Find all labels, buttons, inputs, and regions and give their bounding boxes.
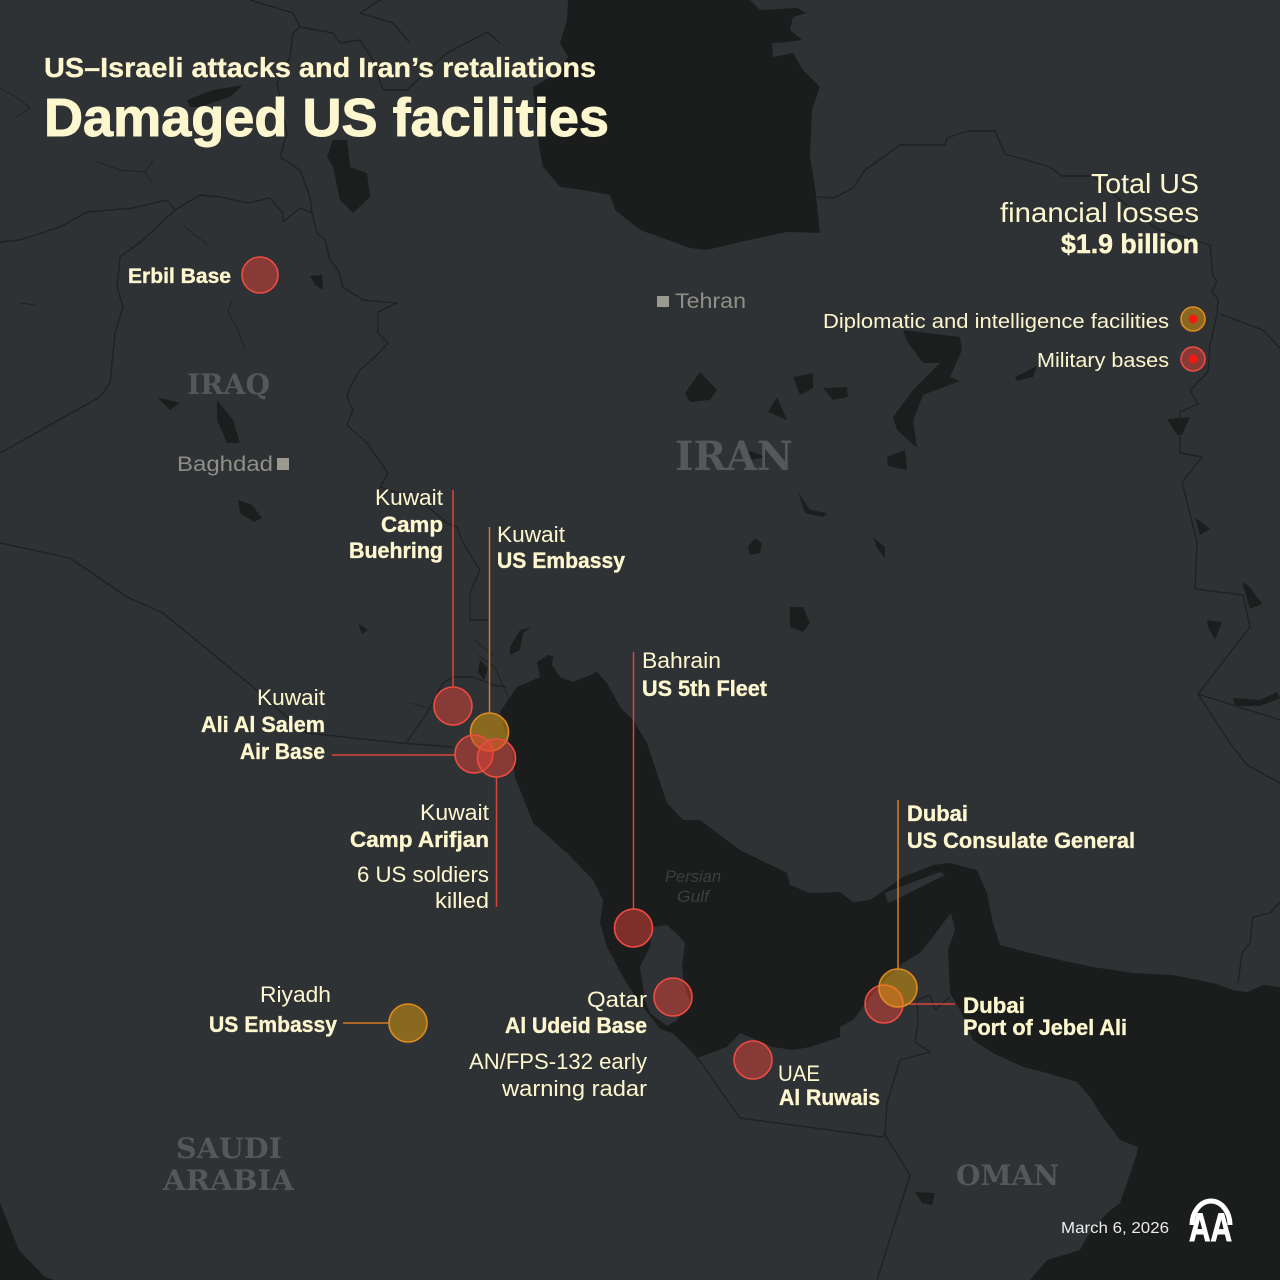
site: Dubai Port of Jebel Ali: Port of Jebel Ali (963, 1015, 1127, 1040)
site: Riyadh US Embassy: Riyadh (260, 982, 331, 1007)
total losses callout: Total US (1091, 168, 1199, 199)
site: Camp Buehring (349, 485, 472, 725)
site: Camp Buehring: Kuwait (375, 485, 443, 510)
site: Dubai US Consulate General: US Consulate General (907, 828, 1135, 853)
site: Kuwait US Embassy: Kuwait (497, 522, 565, 547)
map: Persian Gulf and Gulf of Oman (500, 655, 1280, 1280)
site: Riyadh US Embassy (209, 982, 427, 1042)
site: Kuwait US Embassy (470, 522, 626, 751)
total losses callout (1000, 168, 1199, 259)
subtitle: US–Israeli attacks and Iran’s retaliations (44, 52, 596, 83)
legend (823, 307, 1205, 372)
logo: Anadolu Agency: AA (1189, 1206, 1232, 1250)
site: Kuwait US Embassy: US Embassy (497, 548, 626, 573)
site: Qatar Al Udeid Base: AN/FPS-132 early (469, 1049, 647, 1074)
legend: diplomatic facilities (823, 307, 1205, 333)
site: UAE Al Ruwais (734, 1041, 880, 1110)
title block (44, 52, 609, 148)
country label: Oman: OMAN (956, 1159, 1059, 1192)
site: Bahrain US 5th Fleet: Bahrain (642, 648, 721, 673)
site: Camp Buehring: Buehring (349, 538, 443, 563)
country label: Iran: IRAN (675, 433, 793, 480)
site: Ali Al Salem Air Base: Air Base (240, 739, 325, 764)
map: Caspian Sea (533, 0, 825, 250)
total losses callout: $1.9 billion (1061, 229, 1199, 259)
country label: Iraq: IRAQ (187, 368, 270, 401)
site: Dubai Port of Jebel Ali: Dubai (963, 993, 1025, 1018)
site: Erbil Base (128, 257, 278, 293)
site: Camp Arifjan: Kuwait (420, 800, 489, 825)
site: Qatar Al Udeid Base (469, 978, 692, 1101)
date: March 6, 2026 (1061, 1220, 1169, 1237)
country label: Saudi Arabia: SAUDI (176, 1132, 282, 1165)
map: rivers (0, 88, 510, 709)
city: Tehran: Tehran (675, 290, 746, 313)
city: Baghdad: Baghdad (177, 453, 273, 476)
map: Red Sea corner (0, 1203, 54, 1280)
total losses callout: financial losses (1000, 197, 1199, 228)
site: Camp Arifjan: 6 US soldiers (357, 862, 489, 887)
site: Ali Al Salem Air Base: Ali Al Salem (201, 712, 325, 737)
country label: Saudi Arabia (162, 1132, 295, 1197)
logo: Anadolu Agency (1189, 1201, 1232, 1250)
site: Qatar Al Udeid Base: Qatar (587, 987, 647, 1012)
site: Erbil Base: Erbil Base (128, 265, 231, 288)
water label: Persian Gulf: Persian (665, 867, 721, 886)
site: Camp Arifjan: Camp Arifjan (350, 827, 489, 852)
map: inland lakes (157, 85, 1280, 1205)
site: Qatar Al Udeid Base: Al Udeid Base (505, 1013, 647, 1038)
water label: Persian Gulf: Gulf (677, 887, 711, 906)
site: Camp Arifjan: killed (435, 888, 489, 913)
map: Qatar peninsula (640, 925, 690, 1026)
site: Camp Buehring: Camp (381, 512, 443, 537)
site: Dubai US Consulate General (879, 800, 1135, 1007)
legend: military bases (1037, 347, 1205, 372)
legend: military bases: Military bases (1037, 350, 1169, 372)
water label: Persian Gulf (665, 867, 721, 906)
country label: Saudi Arabia: ARABIA (162, 1164, 295, 1197)
map: Qeshm island (885, 872, 945, 903)
site: Camp Arifjan (350, 739, 516, 913)
site: Dubai US Consulate General: Dubai (907, 801, 968, 826)
site: Bahrain US 5th Fleet (614, 648, 768, 947)
site: UAE Al Ruwais: UAE (778, 1061, 820, 1086)
legend: diplomatic facilities: Diplomatic and intelligence facilities (823, 311, 1169, 333)
main title: Damaged US facilities (44, 88, 609, 148)
site: Ali Al Salem Air Base: Kuwait (257, 685, 325, 710)
site: Bahrain US 5th Fleet: US 5th Fleet (642, 676, 768, 701)
site: UAE Al Ruwais: Al Ruwais (779, 1085, 880, 1110)
site: Dubai Port of Jebel Ali (865, 985, 1127, 1040)
site: Riyadh US Embassy: US Embassy (209, 1012, 338, 1037)
site: Ali Al Salem Air Base (201, 685, 493, 773)
site: Qatar Al Udeid Base: warning radar (501, 1076, 647, 1101)
